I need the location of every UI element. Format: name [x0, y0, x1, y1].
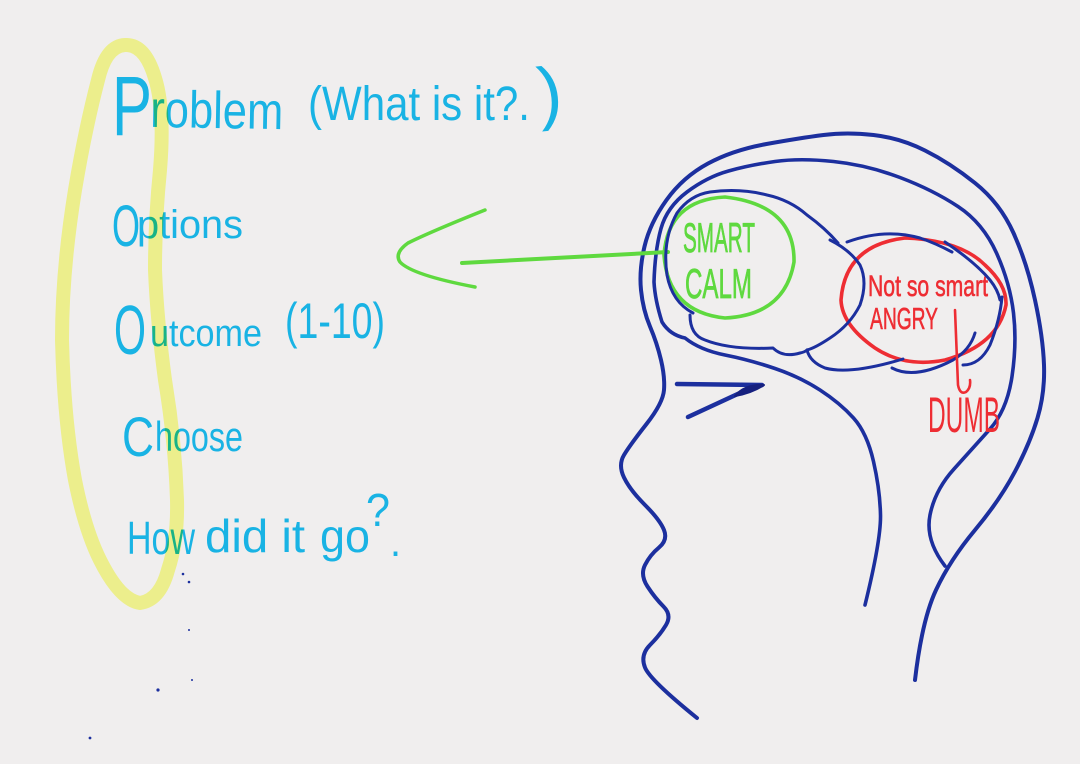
lower folds: [690, 315, 903, 370]
step: problem: P: [112, 59, 152, 153]
yellow highlighter loop: [62, 45, 177, 603]
face and back of head: [621, 134, 1044, 718]
step: how did it go: .: [390, 518, 401, 565]
step: how did it go: [127, 484, 401, 565]
step: how did it go: How: [127, 512, 196, 564]
inner skull and neck line: [654, 160, 1015, 605]
label: not so smart: Not so smart: [868, 270, 988, 303]
step: problem: roblem: [150, 81, 284, 141]
green circle: smart calm: SMART: [683, 214, 755, 261]
step: problem: [112, 52, 566, 153]
step: options: O: [112, 194, 140, 259]
checklist text: [112, 52, 566, 565]
label: calm: CALM: [685, 260, 752, 307]
step: choose: [122, 405, 243, 468]
green circle: smart calm: [664, 197, 794, 318]
red arrow to dumb: [955, 310, 970, 393]
step: how did it go: did it: [205, 510, 305, 562]
step: problem: ): [534, 52, 566, 132]
step: choose: hoose: [155, 413, 243, 460]
label: angry: ANGRY: [870, 301, 938, 336]
head outline: [621, 134, 1044, 718]
brain folds: [666, 191, 1002, 372]
step: outcome: [114, 291, 385, 369]
step: outcome: (1-10): [285, 293, 385, 349]
step: how did it go: go: [320, 510, 370, 562]
red circle: not so smart angry: [841, 238, 1006, 362]
step: problem: (What is it?.: [308, 78, 530, 131]
step: outcome: utcome: [150, 313, 262, 355]
step: choose: C: [122, 405, 154, 468]
ink specks: [89, 573, 193, 739]
middle fold: [807, 240, 864, 350]
text: DUMB: [928, 387, 1000, 443]
rear lobe top: [847, 234, 952, 252]
eye: [677, 384, 762, 417]
step: options: ptions: [137, 203, 243, 247]
step: options: [112, 194, 243, 259]
frontal lobe: [666, 191, 838, 313]
step: how did it go: ?: [366, 484, 390, 536]
green arrow pointing to checklist: [398, 210, 668, 287]
step: outcome: O: [114, 291, 146, 369]
